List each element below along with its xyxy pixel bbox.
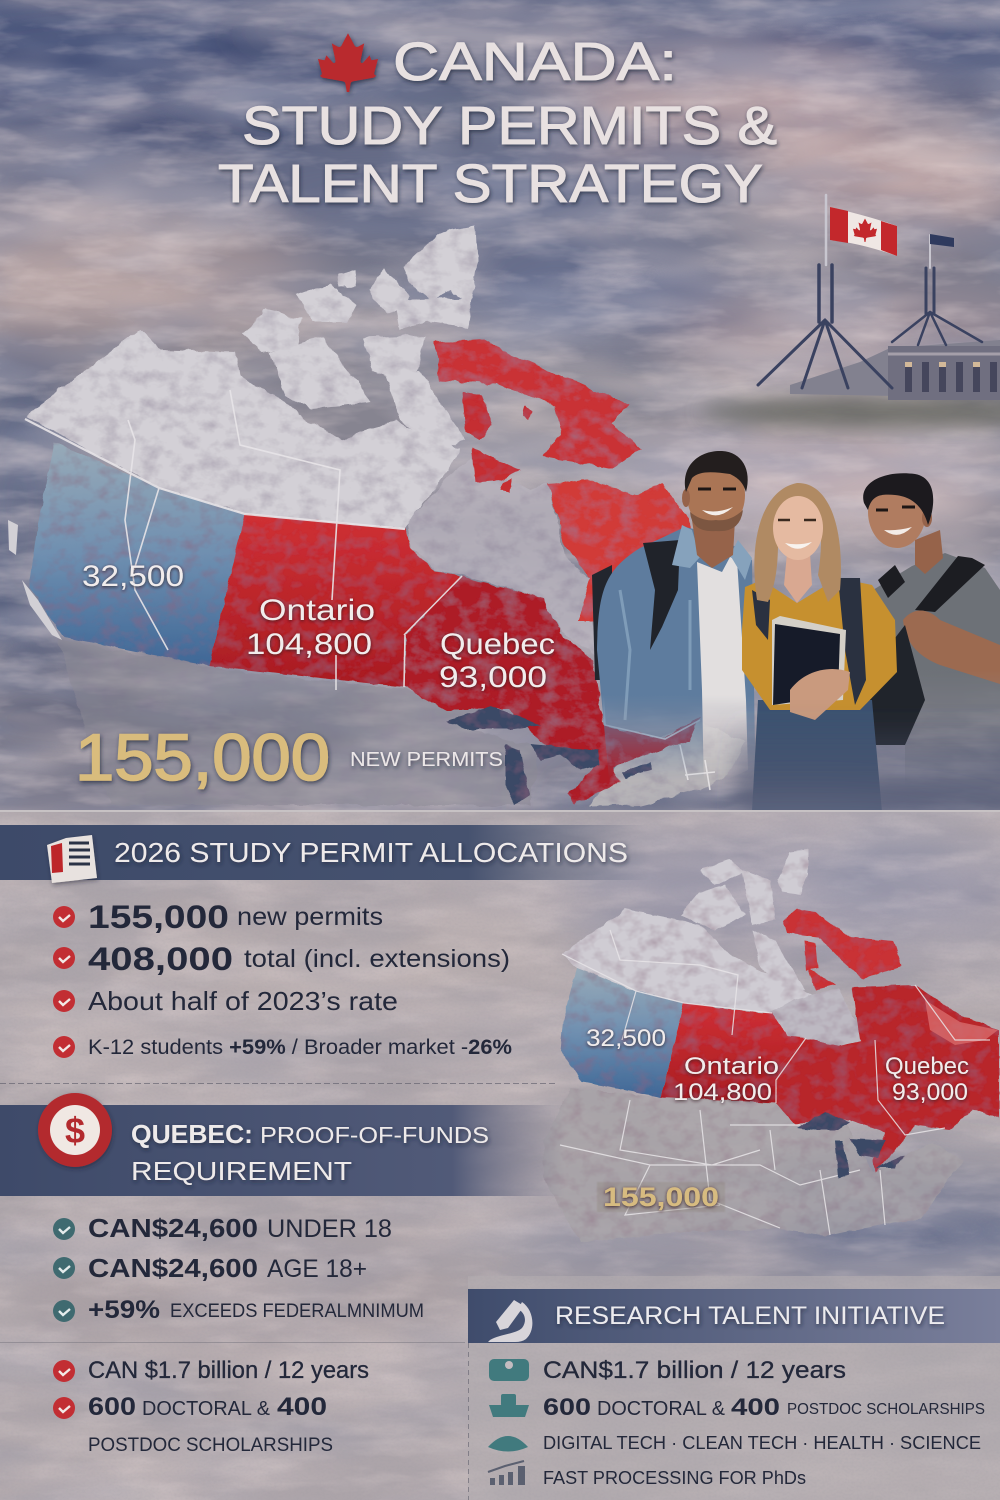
panel: research talent initiative: 600 <box>543 1394 591 1421</box>
map: Canada top map <box>8 226 701 805</box>
map labels: small map: Ontario <box>684 1053 779 1080</box>
small map: Great Lakes <box>797 1112 905 1178</box>
lower panel background <box>0 810 1000 1500</box>
icon: tech globe <box>488 1436 528 1452</box>
region: prairie red <box>209 514 462 687</box>
list: research funding summary: 400 <box>277 1393 327 1421</box>
small map: prairie red <box>661 1003 806 1103</box>
list: allocations: new permits <box>237 903 383 931</box>
map labels: small map: Quebec <box>885 1053 969 1080</box>
list: allocations: About half of 2023’s rate <box>88 986 398 1016</box>
list: proof of funds: AGE 18+ <box>267 1255 367 1283</box>
map labels: small map: 32,500 <box>586 1025 666 1052</box>
backpack middle <box>855 625 925 745</box>
list: proof of funds <box>53 1213 424 1324</box>
list: allocations: total (incl. extensions) <box>244 945 510 973</box>
small map: Labrador pale <box>925 1000 998 1045</box>
list: proof of funds: UNDER 18 <box>267 1215 392 1243</box>
list: proof of funds: EXCEEDS FEDERALMNIMUM <box>170 1301 424 1322</box>
icon: funding <box>489 1359 529 1381</box>
icon: maple leaf <box>318 33 378 92</box>
list: allocations: 155,000 <box>88 899 229 935</box>
icon: growth chart <box>488 1461 525 1485</box>
map labels: small map: 104,800 <box>673 1079 772 1106</box>
map labels: top map: Ontario <box>259 594 375 627</box>
Canadian flag <box>830 207 897 256</box>
icon: dollar badge <box>38 1093 112 1167</box>
header bar: Quebec proof of funds: PROOF-OF-FUNDS <box>260 1122 489 1148</box>
map labels: top map: Quebec <box>440 628 555 661</box>
title <box>218 32 777 214</box>
list: research funding summary: CAN $1.7 billion / 12 years <box>88 1357 369 1384</box>
panel: research talent initiative: FAST PROCESSING FOR PhDs <box>543 1468 806 1488</box>
map labels: top map: 104,800 <box>246 628 372 661</box>
title: CANADA: <box>393 32 677 92</box>
map labels: small map <box>586 1025 969 1106</box>
small blue flag <box>930 234 954 247</box>
region: British Columbia blue <box>29 442 245 666</box>
big stat: 155,000 new permits <box>75 720 503 794</box>
title: TALENT STRATEGY <box>218 154 763 214</box>
header bar: Quebec proof of funds <box>0 1093 565 1196</box>
small map: Ontario and Quebec red <box>776 985 999 1172</box>
header bar: 2026 study permit allocations: 2026 STUDY PERMIT ALLOCATIONS <box>114 837 628 868</box>
student woman <box>742 483 897 812</box>
student right <box>863 473 1000 754</box>
list: research funding summary: DOCTORAL & <box>142 1398 271 1420</box>
map labels: small map: 93,000 <box>892 1079 968 1106</box>
list: research funding summary: POSTDOC SCHOLARSHIPS <box>88 1435 333 1456</box>
book <box>772 616 846 705</box>
small map: blue region <box>560 968 684 1097</box>
icon: microscope <box>488 1300 532 1342</box>
map: US lower shadow region, top map <box>58 640 745 806</box>
list: proof of funds: CAN$24,600 <box>88 1213 258 1243</box>
panel: research talent initiative: DOCTORAL & <box>597 1398 726 1420</box>
panel: research talent initiative <box>468 1276 1000 1500</box>
bullet 1 <box>53 906 75 928</box>
lower haze <box>735 715 1000 815</box>
header bar: 2026 study permit allocations <box>0 825 650 883</box>
icon: dollar badge: $ <box>65 1110 85 1151</box>
panel: research talent initiative: 400 <box>731 1394 780 1421</box>
panel: research talent initiative: POSTDOC SCHOLARSHIPS <box>787 1401 985 1418</box>
Baffin red island <box>434 339 641 469</box>
small map: Baffin red <box>784 909 902 990</box>
icon: scholarships <box>489 1394 529 1417</box>
region: Quebec red <box>548 480 690 622</box>
list: allocations: K-12 students +59% / Broader market - 26% <box>88 1036 512 1059</box>
panel: research talent initiative: RESEARCH TALENT INITIATIVE <box>555 1302 945 1330</box>
panel: research talent initiative: DIGITAL TECH · CLEAN TECH · HEALTH · SCIENCE <box>543 1433 981 1453</box>
small map: USA <box>543 1088 963 1242</box>
panel: research talent initiative: CAN$1.7 billion / 12 years <box>543 1357 846 1384</box>
list: allocations <box>53 899 512 1059</box>
map labels: top map: 32,500 <box>82 560 184 593</box>
title: STUDY PERMITS & <box>242 96 777 156</box>
map: Canada small <box>560 850 999 1235</box>
list: research funding summary: 600 <box>88 1393 136 1421</box>
list: proof of funds: +59% <box>88 1296 160 1324</box>
small map stat: 155,000: 155,000 <box>603 1182 719 1212</box>
region: Ontario dark red <box>404 576 701 805</box>
list: proof of funds: CAN$24,600 <box>88 1253 258 1283</box>
big stat: 155,000 new permits: 155,000 <box>75 720 330 794</box>
provincial borders <box>25 390 700 739</box>
icon: document <box>47 835 97 883</box>
map labels: top map: 93,000 <box>439 661 547 694</box>
students photo <box>592 451 1000 815</box>
list: research funding summary <box>53 1357 369 1456</box>
student left <box>592 451 755 775</box>
header bar: Quebec proof of funds: QUEBEC: <box>131 1119 253 1149</box>
Parliament building and flags <box>700 195 1000 428</box>
territories: white region <box>25 226 477 530</box>
Great Lakes <box>446 706 652 805</box>
list: allocations: 408,000 <box>88 941 233 977</box>
map labels: top map <box>82 560 555 694</box>
header bar: Quebec proof of funds: REQUIREMENT <box>131 1156 352 1186</box>
big stat: 155,000 new permits: NEW PERMITS <box>350 749 503 771</box>
Hudson Bay pale area <box>408 460 596 655</box>
